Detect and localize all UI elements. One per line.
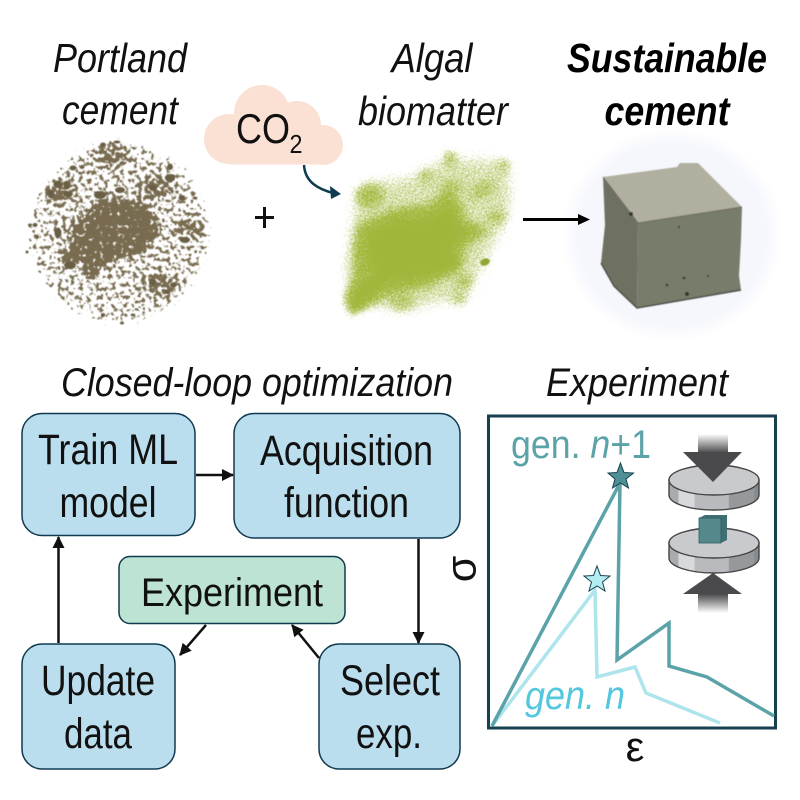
bottom platen	[669, 528, 759, 573]
axis label: epsilon: ε	[626, 723, 644, 770]
box: Acquisition function: Acquisition	[260, 427, 433, 475]
box: Train ML model: model	[60, 479, 156, 527]
label: gen. n: gen. n	[525, 674, 625, 718]
top platen	[669, 465, 759, 510]
icon: compression test	[669, 434, 759, 613]
image: sustainable cement cube	[561, 128, 783, 342]
box: Update data: data	[64, 710, 132, 758]
box: Select exp.: Select	[340, 657, 440, 705]
arrow: algae to sustainable cement	[523, 214, 590, 225]
heading: Closed-loop optimization: Closed-loop optimization	[61, 361, 453, 405]
top arrow	[683, 434, 742, 482]
icon: star gen n+1	[608, 463, 634, 488]
box: Update data	[22, 644, 175, 769]
arrow: experiment to update	[180, 625, 206, 655]
box: Update data: Update	[41, 657, 155, 705]
chart: stress-strain plot	[488, 416, 776, 728]
box: Experiment: Experiment	[141, 571, 323, 615]
heading: Sustainable cement: cement	[604, 88, 732, 134]
box: Select exp.	[319, 644, 460, 769]
arrow: select to experiment	[292, 625, 319, 658]
heading: Portland cement: Portland	[53, 35, 188, 81]
image: algal biomatter powder	[340, 149, 517, 320]
heading: Algal biomatter: Algal	[389, 35, 474, 81]
heading: Algal biomatter: biomatter	[358, 88, 510, 134]
box: Experiment	[119, 556, 345, 624]
line: gen n	[492, 590, 720, 726]
box: Acquisition function	[234, 414, 460, 538]
heading: Portland cement	[53, 35, 188, 133]
arrow: acquisition to select	[417, 539, 420, 643]
box: Train ML model	[22, 414, 195, 536]
icon: star gen n	[584, 566, 610, 591]
icon: CO2 cloud	[204, 85, 343, 165]
heading: Portland cement: cement	[62, 87, 179, 133]
sample cube	[699, 515, 727, 543]
icon: CO2 cloud: 2	[290, 129, 302, 159]
arrow: update to train	[57, 537, 60, 643]
heading: Sustainable cement	[567, 35, 767, 134]
box: Train ML model: Train ML	[38, 426, 178, 474]
image: Portland cement powder	[25, 139, 213, 327]
heading: Sustainable cement: Sustainable	[567, 35, 767, 81]
heading: Algal biomatter	[358, 35, 510, 134]
bottom arrow	[683, 573, 742, 613]
box: Acquisition function: function	[284, 479, 409, 527]
arrow: train to acquisition	[196, 474, 233, 476]
box: Select exp.: exp.	[356, 710, 422, 758]
axis label: sigma: σ	[438, 556, 486, 582]
arrow: CO2 to algae	[304, 165, 341, 199]
label: gen. n+1: gen. n+1	[511, 423, 651, 467]
icon: plus sign	[255, 207, 274, 228]
heading: Experiment: Experiment	[546, 361, 730, 405]
line: gen n+1	[492, 483, 774, 726]
icon: CO2 cloud: CO	[236, 105, 290, 152]
